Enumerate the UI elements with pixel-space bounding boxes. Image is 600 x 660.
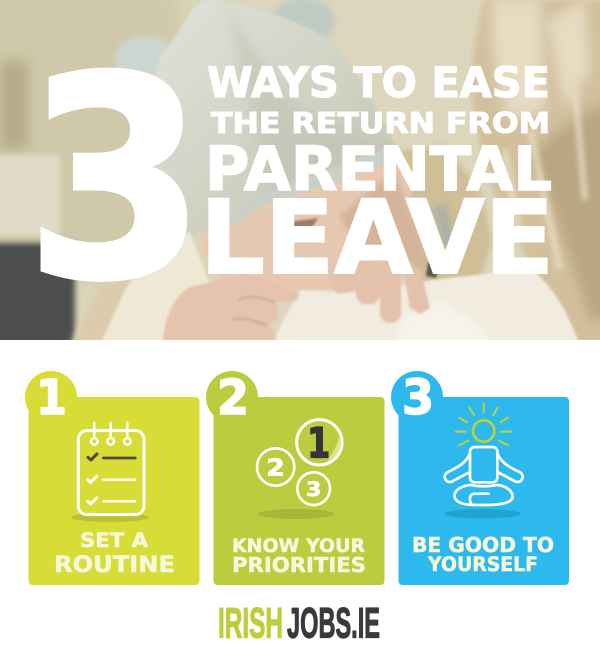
card background bbox=[28, 397, 200, 585]
label: be good to yourself: YOURSELF bbox=[427, 553, 538, 576]
sleeve bbox=[395, 145, 492, 285]
number badge 1 bbox=[25, 370, 77, 426]
icon: numbered priority circles: 2 bbox=[266, 453, 285, 481]
hat bbox=[149, 0, 397, 238]
hat ears bbox=[113, 34, 169, 76]
title line: leave: LEAVE bbox=[200, 179, 554, 298]
title bbox=[200, 58, 554, 298]
label: set a routine: ROUTINE bbox=[54, 553, 175, 578]
blanket bbox=[270, 272, 580, 345]
card background bbox=[214, 397, 384, 585]
label: know your priorities: PRIORITIES bbox=[232, 553, 366, 577]
face bbox=[200, 160, 412, 292]
label: be good to yourself bbox=[412, 533, 554, 576]
panel: know your priorities bbox=[206, 370, 384, 585]
label: know your priorities: KNOW YOUR bbox=[232, 535, 365, 557]
label: know your priorities bbox=[232, 535, 366, 577]
hat brim bbox=[230, 149, 384, 226]
cream sleeve bbox=[100, 232, 210, 345]
number badge 2: 2 bbox=[217, 370, 249, 426]
panel: be good to yourself bbox=[391, 370, 569, 585]
logo: irishjobs.ie: JOBS.IE bbox=[287, 600, 380, 648]
icon: numbered priority circles bbox=[257, 418, 342, 519]
icon: numbered priority circles: 1 bbox=[307, 418, 330, 467]
hero photo: parent holding sleeping baby bbox=[0, 0, 600, 353]
title line: the return from: THE RETURN FROM bbox=[211, 107, 550, 140]
baby left hand bbox=[162, 281, 300, 340]
icon: numbered priority circles: 3 bbox=[306, 478, 321, 501]
label: be good to yourself: BE GOOD TO bbox=[412, 533, 554, 557]
title line: parental: PARENTAL bbox=[205, 134, 552, 205]
number badge 2 bbox=[206, 370, 258, 426]
icon: notepad checklist bbox=[71, 423, 149, 522]
card background bbox=[398, 397, 569, 585]
number badge 3 bbox=[391, 370, 443, 426]
panel: set a routine bbox=[25, 370, 200, 585]
logo: irishjobs.ie: IRISH bbox=[218, 600, 283, 648]
number badge 3: 3 bbox=[402, 370, 434, 426]
icon: meditating figure with sun bbox=[444, 404, 523, 518]
title line: ways to ease: WAYS TO EASE bbox=[207, 58, 550, 107]
number badge 1: 1 bbox=[36, 370, 67, 426]
baby right hand fingers bbox=[330, 258, 430, 323]
label: set a routine: SET A bbox=[80, 529, 148, 552]
big numeral 3: 3 bbox=[25, 18, 206, 342]
label: set a routine bbox=[54, 529, 175, 578]
hair bbox=[472, 0, 600, 345]
